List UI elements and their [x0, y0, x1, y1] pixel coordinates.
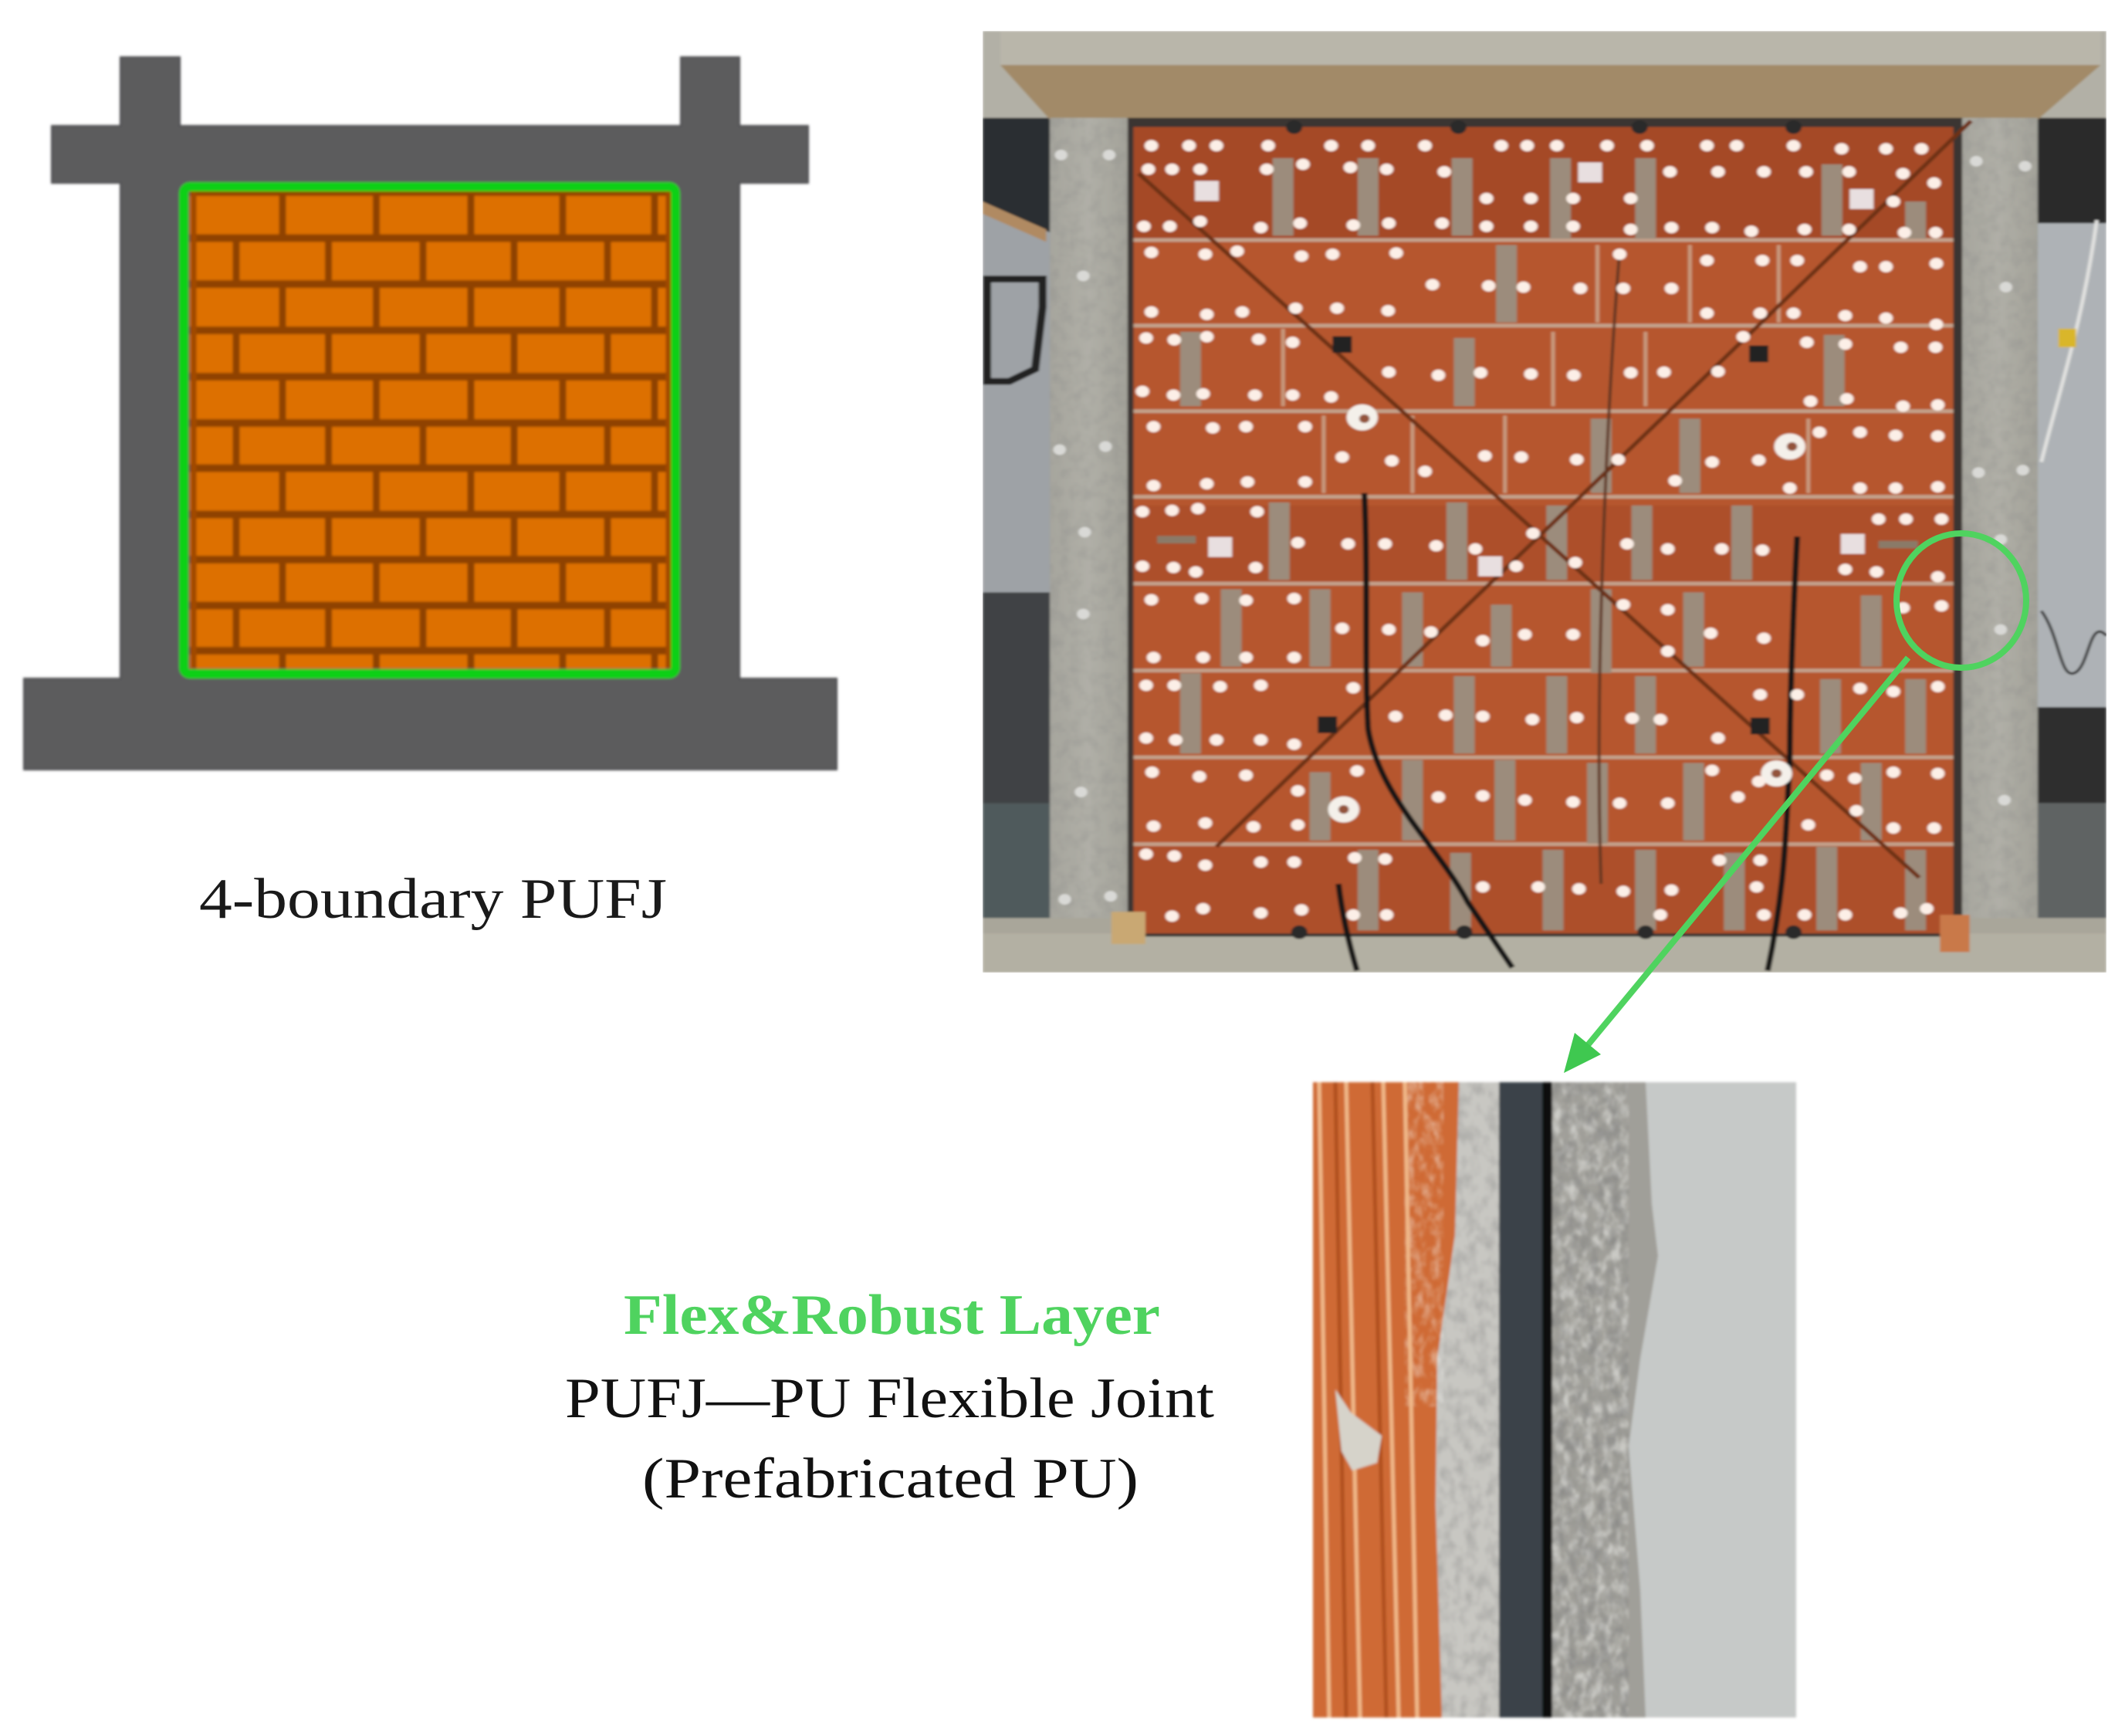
brick wall: [1128, 118, 1962, 936]
white dots: [1142, 146, 1941, 916]
plaster patch: [1335, 1389, 1382, 1470]
RC columns: [1050, 118, 1128, 921]
rough aggregate layer: [1548, 1082, 1658, 1717]
top anchors: [1294, 127, 1794, 932]
side bolts: [1157, 540, 1918, 544]
text block: joint description: [565, 1284, 1214, 1511]
label: Prefabricated PU: (Prefabricated PU): [642, 1447, 1139, 1511]
PU flexible joint outline: [184, 187, 675, 674]
orange brick: [1313, 1082, 1459, 1717]
heading: Flex&Robust Layer: Flex&Robust Layer: [624, 1284, 1160, 1347]
smooth concrete column: [1613, 1082, 1796, 1717]
column dots: [1060, 155, 2025, 899]
diagonal cables: [1139, 121, 1971, 878]
top beam and soffit: [983, 31, 2106, 118]
dark PU layer: [1499, 1082, 1549, 1717]
callout: green circle on joint: [1897, 533, 2026, 668]
masonry brick infill: [190, 192, 672, 668]
photo: tested masonry infill wall: [983, 31, 2106, 973]
arrow: from joint to detail photo: [1564, 658, 1908, 1073]
bed joints: [1134, 240, 1954, 844]
caption: 4-boundary PUFJ: 4-boundary PUFJ: [199, 868, 667, 931]
label: PUFJ full name: PUFJ—PU Flexible Joint: [565, 1367, 1214, 1430]
corner blocks: [1112, 912, 1145, 944]
clamps: [1344, 418, 1790, 810]
mortar head joints: [1190, 158, 1916, 930]
marker targets: [1206, 172, 1862, 567]
black gap: [1542, 1082, 1552, 1717]
sensors: [1328, 344, 1760, 726]
base slab: [983, 917, 2106, 933]
diagram: 4-boundary frame with masonry infill: [24, 57, 837, 770]
thin head joints: [1283, 245, 1809, 493]
faint central cable: [1599, 251, 1619, 884]
photo: PU flexible joint close-up: [1313, 1082, 1796, 1717]
light plaster layer: [1436, 1082, 1501, 1717]
RC frame: [24, 57, 837, 770]
black instrument cables: [1338, 493, 1797, 971]
side backgrounds: [983, 118, 1050, 232]
